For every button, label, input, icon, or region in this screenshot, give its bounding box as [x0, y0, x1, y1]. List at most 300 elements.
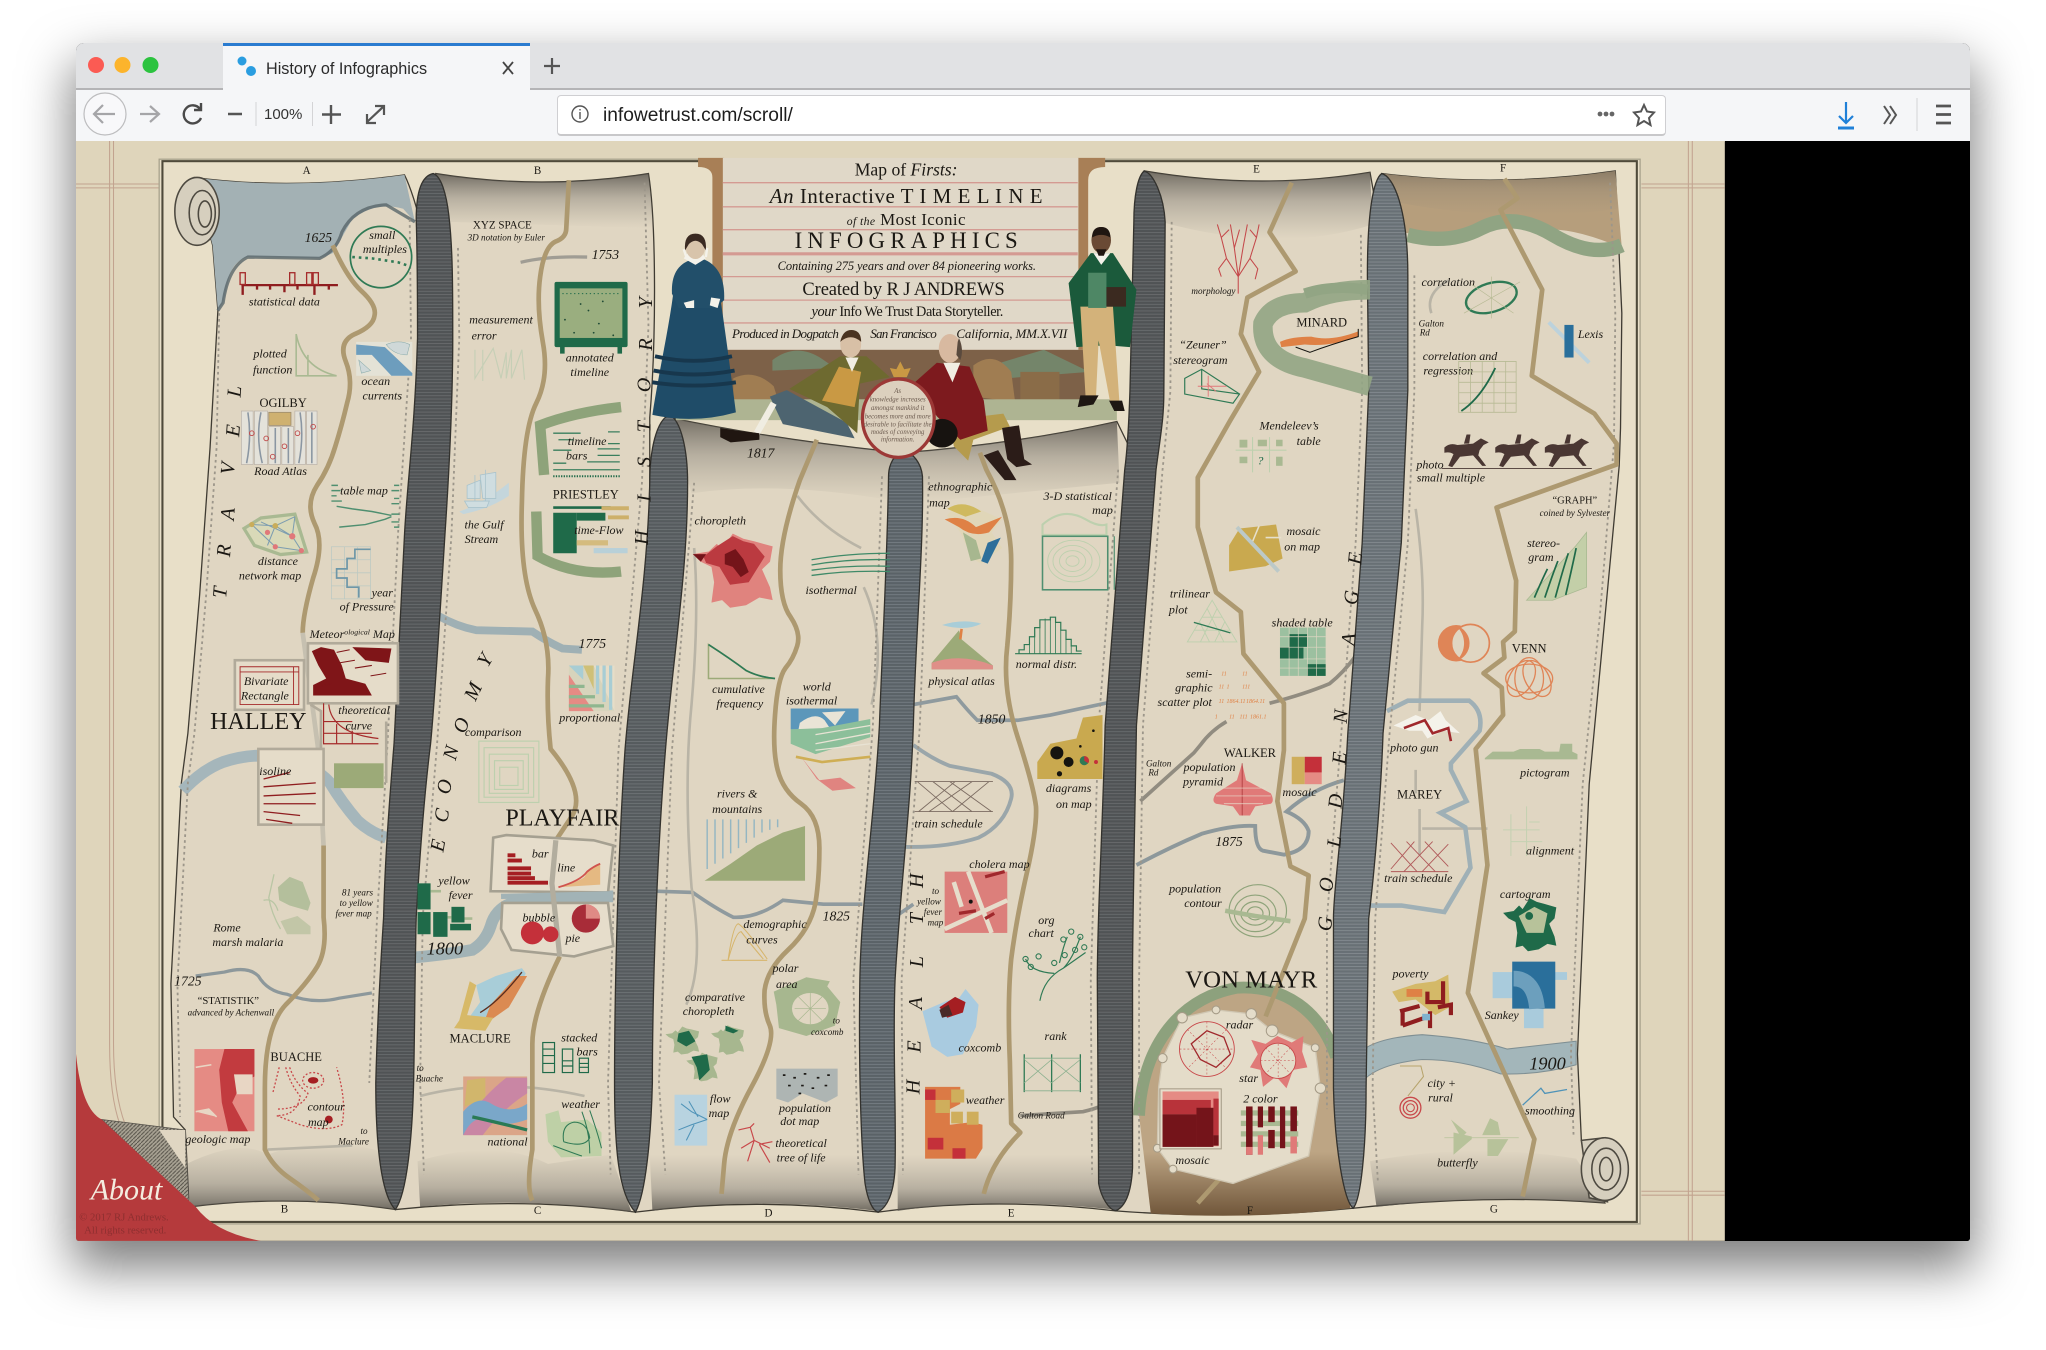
- Galton Road: [1020, 658, 1354, 1116]
- note: Galton Rd column G: Rd: [1419, 328, 1430, 338]
- note: to Maclure: Maclure: [337, 1137, 369, 1147]
- medallion: knowledge increases: [870, 397, 926, 404]
- river 1850: [913, 697, 1123, 720]
- panel: scroll column E: [877, 421, 1140, 1212]
- map: weather contour: weather: [561, 1097, 600, 1111]
- chart: 2 color: [1241, 1092, 1298, 1155]
- note: to coxcomb: [811, 1015, 844, 1037]
- chart: year of pressure: [331, 547, 394, 614]
- title line: storyteller: your Info We Trust Data Storyteller.: [810, 304, 1003, 320]
- vertical title: HEALTH: [902, 872, 928, 1095]
- chart: correlation: correlation: [1422, 275, 1475, 289]
- medallion: As: [893, 388, 901, 395]
- note: to Buache: to: [417, 1063, 424, 1073]
- map: Ogilby road atlas: [241, 396, 317, 478]
- note: 81 years to yellow fever map: to yellow: [340, 898, 374, 908]
- chart: butterfly: butterfly: [1437, 1156, 1478, 1170]
- note: Galton Rd column G: [1419, 319, 1444, 338]
- river 1700: [183, 756, 386, 838]
- chart: 3-D statistical map: 3-D statistical: [1043, 489, 1113, 503]
- panel: scroll column G: [1350, 171, 1622, 1208]
- chart: bubble: bubble: [523, 910, 556, 924]
- chart: smoothing: [1523, 1088, 1575, 1117]
- diagram: Zeuner stereogram: [1173, 337, 1240, 403]
- chart: stereogram: [1527, 532, 1587, 600]
- figure: seated man in red: [913, 334, 1032, 480]
- vertical title: HISTORY: Y: [635, 294, 657, 308]
- chart: pie: pie: [564, 931, 581, 945]
- column letters bottom: [281, 1204, 1498, 1219]
- map: Minard: [1263, 288, 1370, 386]
- chart: yellow fever: [418, 874, 473, 937]
- chart: radar: radar: [1226, 1017, 1254, 1031]
- map: geologic map: [185, 1049, 254, 1146]
- heading: VENN: VENN: [1512, 641, 1547, 655]
- chart: semi-graphic scatter plot: 11: [1219, 685, 1224, 691]
- map: ethnographic: [928, 480, 1002, 564]
- main road column A: [265, 245, 375, 1200]
- year labels: 1900: [1529, 1053, 1566, 1073]
- about link: About: [89, 1173, 163, 1206]
- chart: small multiples: small: [369, 228, 396, 242]
- heading: PLAYFAIR: PLAYFAIR: [505, 805, 620, 832]
- medallion: becomes more and more: [865, 413, 931, 420]
- diagram: theoretical tree of life: tree of life: [777, 1150, 826, 1164]
- map: ethnographic: ethnographic: [928, 480, 993, 494]
- vertical title: GOLDEN AGE: G: [1314, 915, 1337, 932]
- chart: cumulative frequency: [708, 645, 775, 710]
- chart: rivers and mountains: mountains: [712, 802, 763, 816]
- heading: PRIESTLEY: PRIESTLEY: [553, 488, 619, 502]
- chart: trilinear plot: [1168, 587, 1237, 642]
- map: distance network: network map: [239, 568, 301, 582]
- chart: polar area: polar: [771, 961, 799, 975]
- column letters top: B: [534, 165, 541, 177]
- vertical title: ECONOMY: E: [426, 837, 450, 854]
- chart: semi-graphic scatter plot: scatter plot: [1158, 695, 1213, 709]
- chart: normal distribution: normal distr.: [1016, 657, 1077, 671]
- note: 81 years to yellow fever map: 81 years: [342, 887, 374, 897]
- chart: semi-graphic scatter plot: 1: [1226, 685, 1229, 691]
- vertical title: HEALTH: H: [902, 1078, 924, 1095]
- tab title: History of Infographics: [266, 60, 427, 78]
- diagram: org chart: org: [1038, 913, 1055, 927]
- vertical title: HEALTH: L: [906, 956, 928, 968]
- note: to coxcomb: to: [833, 1015, 840, 1025]
- note: Galton Road: Galton Road: [1018, 1111, 1065, 1121]
- chart: polar area: area: [776, 977, 798, 991]
- chart: small multiples: multiples: [363, 242, 407, 256]
- note: STATISTIK: [188, 995, 275, 1018]
- river 1900: [1366, 1035, 1576, 1078]
- chart: yellow fever: fever: [449, 888, 473, 902]
- chart: weather grid: weather: [966, 1093, 1005, 1107]
- chart: polar area: [771, 961, 840, 1036]
- map: geologic map: geologic map: [185, 1132, 250, 1146]
- fold between B and D: [615, 415, 688, 1212]
- column letters bottom: B: [281, 1204, 288, 1216]
- scroll roll top left: [175, 177, 219, 245]
- map: flow map: flow: [710, 1092, 731, 1106]
- map: cartogram: cartogram: [1500, 887, 1551, 901]
- title line: Map of Firsts: Map of Firsts:: [855, 160, 958, 180]
- chart: semi-graphic scatter plot: 11: [1221, 672, 1227, 678]
- title line: produced in: California, MM.X.VII: [956, 326, 1068, 341]
- map: Maclure: [450, 968, 527, 1046]
- vertical title: ECONOMY: [426, 647, 499, 854]
- chart: stacked bars: [543, 1030, 598, 1073]
- vertical title: GOLDEN AGE: E: [1344, 551, 1367, 567]
- note: to Maclure: [337, 1126, 369, 1147]
- chart: plotted function: [252, 334, 337, 376]
- active tab: [223, 43, 530, 90]
- chart: time-flow: time-Flow: [574, 523, 624, 537]
- fold between D and E: [859, 450, 923, 1212]
- year labels: 1700: [272, 744, 312, 772]
- column letters bottom: D: [764, 1207, 773, 1219]
- lower left curl: [102, 1120, 196, 1208]
- river 1825: [655, 891, 913, 919]
- note: XYZ space: 3D notation by Euler: [467, 232, 545, 242]
- note: to coxcomb: coxcomb: [811, 1027, 844, 1037]
- title line: An Interactive Timeline: An Interactive T I M E L I N E: [768, 184, 1043, 208]
- chart: rank: [1024, 1029, 1080, 1092]
- column letters bottom: G: [1490, 1204, 1498, 1216]
- chart: stacked bars: bars: [576, 1045, 598, 1059]
- title line: containing: Containing 275 years and over 84 pioneering works.: [778, 259, 1036, 273]
- chart: Marey train schedule: train schedule: [1384, 871, 1453, 885]
- medallion: desirable to facilitate the: [864, 422, 932, 429]
- chart: demographic curves: demographic: [743, 917, 807, 931]
- chart: trilinear plot: plot: [1168, 602, 1188, 616]
- chart: semi-graphic scatter plot: [1158, 666, 1266, 721]
- map: flow map: [675, 1092, 731, 1146]
- title line: produced in: San Francisco: [870, 326, 937, 341]
- year labels: 1753: [592, 247, 619, 262]
- chart: semi-graphic scatter plot: 1864.11: [1246, 698, 1265, 705]
- chart: 3-D statistical map: map: [1092, 503, 1113, 517]
- vertical title: ECONOMY: N: [439, 742, 464, 763]
- page actions: [1598, 105, 1654, 125]
- map: flow map: map: [709, 1106, 729, 1120]
- map: Buache contour: map: [308, 1115, 329, 1129]
- reload: [184, 103, 201, 123]
- diagram: theoretical tree of life: theoretical: [775, 1136, 828, 1150]
- chart: comparison: comparison: [465, 725, 522, 739]
- diagram: org chart: chart: [1029, 926, 1055, 940]
- illustration: photo gun: [1389, 711, 1460, 755]
- map: national geologic: national: [488, 1135, 528, 1149]
- chart: Sankey: [1485, 962, 1567, 1028]
- map background paper: [76, 141, 1725, 1241]
- chart: population pyramid: pyramid: [1182, 775, 1224, 789]
- vertical title: HISTORY: R: [635, 338, 657, 352]
- chart: measurement error: measurement: [469, 313, 533, 327]
- chart: proportional: [558, 665, 621, 725]
- chart: cumulative frequency: cumulative: [712, 682, 765, 696]
- chart: stereogram: gram: [1528, 550, 1554, 564]
- title line: created by: Created by R J ANDREWS: [802, 279, 1005, 300]
- year labels: 1800: [427, 939, 463, 959]
- map: meteorological map: [308, 627, 398, 703]
- medallion: information.: [881, 437, 915, 444]
- panel: scroll column D: [633, 418, 906, 1212]
- brown top of column G: [1382, 171, 1622, 250]
- fold between E and F: [1097, 171, 1165, 1211]
- heading: HALLEY: HALLEY: [210, 708, 307, 735]
- map: poverty: [1391, 966, 1451, 1028]
- chart: semi-graphic scatter plot: semi-: [1186, 666, 1212, 680]
- map: Buache contour: contour: [308, 1099, 345, 1113]
- map: population dot map: dot map: [780, 1114, 819, 1128]
- chart: rivers and mountains: [705, 786, 805, 881]
- chart: yellow fever: yellow: [437, 874, 470, 888]
- chart: annotated timeline: annotated: [566, 351, 615, 365]
- chart: Lexis: Lexis: [1577, 327, 1603, 341]
- chart: comparison: [465, 725, 539, 802]
- side roads: [267, 281, 1487, 1150]
- copyright: © 2017 RJ Andrews.: [79, 1211, 169, 1223]
- map: cholera: cholera map: [969, 857, 1030, 871]
- map: ethnographic: map: [929, 495, 950, 509]
- vertical title: HEALTH: H: [906, 872, 928, 889]
- year labels: 1817: [747, 445, 776, 460]
- map: Ogilby road atlas: Road Atlas: [253, 464, 307, 478]
- note: Galton Rd: Galton: [1146, 758, 1172, 768]
- vertical title: HEALTH: A: [905, 997, 927, 1012]
- chart: year of pressure: of Pressure: [340, 600, 394, 614]
- chart: cumulative frequency: frequency: [716, 696, 764, 710]
- vertical title: HISTORY: S: [634, 457, 656, 467]
- chart: star: [1239, 1036, 1307, 1088]
- vertical title: HEALTH: E: [904, 1040, 926, 1054]
- vertical title: TRAVEL: L: [223, 385, 246, 399]
- title line: of the Most Iconic: of the Most Iconic: [847, 210, 966, 229]
- main road column F: [1198, 183, 1309, 1203]
- map: world isothermal: isothermal: [786, 694, 838, 708]
- vertical title: GOLDEN AGE: E: [1328, 750, 1352, 766]
- chart: walker mosaic: mosaic: [1283, 785, 1317, 799]
- chart: measurement error: [469, 313, 533, 381]
- back button: [84, 93, 126, 135]
- diagram: Venn knot: [1501, 656, 1557, 701]
- chart: Mendeleev's table: ?: [1257, 454, 1263, 468]
- chart: isoline: isoline: [259, 764, 292, 778]
- chart: walker mosaic: [1283, 757, 1322, 799]
- chart: semi-graphic scatter plot: 1861.1: [1250, 715, 1266, 721]
- chart: train schedule: train schedule: [914, 816, 983, 830]
- map: cholera: [945, 857, 1030, 933]
- vertical title: TRAVEL: R: [213, 543, 236, 559]
- illustration: photo gun: photo gun: [1389, 741, 1439, 755]
- column letters top: [303, 162, 1506, 177]
- copyright: [79, 1211, 169, 1236]
- year labels: 1850: [978, 711, 1005, 726]
- map: ocean currents: ocean: [361, 374, 390, 388]
- map: national geologic: [463, 1076, 528, 1149]
- map: ocean currents: currents: [363, 388, 402, 402]
- illustration: the Gulf Stream: Stream: [465, 532, 499, 546]
- note: GRAPH: [1540, 496, 1611, 518]
- figure: Nightingale: [652, 234, 736, 419]
- chart: population pyramid: [1182, 760, 1273, 816]
- chart: train schedule: [914, 782, 993, 830]
- chart: semi-graphic scatter plot: 111: [1242, 685, 1250, 691]
- vertical title: TRAVEL: V: [217, 459, 240, 475]
- heading: WALKER: WALKER: [1224, 746, 1277, 760]
- address bar: [557, 95, 1666, 136]
- medallion: amongst mankind it: [871, 405, 925, 412]
- note: to Buache: Buache: [416, 1073, 443, 1083]
- vertical title: ECONOMY: O: [433, 777, 457, 796]
- map: diagrams on map: diagrams: [1046, 781, 1092, 795]
- note: to yellow fever map: map: [928, 917, 944, 927]
- river 1753: [521, 257, 587, 262]
- year labels: 1725: [174, 974, 202, 989]
- note: to yellow fever map: yellow: [916, 897, 942, 907]
- vertical title: TRAVEL: E: [222, 423, 245, 439]
- title cartouche: [723, 158, 1078, 350]
- chart: physical atlas: [927, 621, 995, 688]
- chart: smoothing: smoothing: [1525, 1103, 1575, 1117]
- green arcs around Priestley: [536, 407, 621, 573]
- chart: semi-graphic scatter plot: 11: [1242, 672, 1248, 678]
- chart: butterfly: [1437, 1118, 1519, 1170]
- medallion: modes of conveying: [871, 429, 925, 436]
- fill panel green: [334, 763, 384, 788]
- diagram: org chart: [1023, 913, 1087, 1001]
- chart: city + rural: city +: [1428, 1076, 1456, 1090]
- map: comparative choropleth: comparative: [685, 990, 746, 1004]
- map: choropleth of France: [693, 514, 773, 608]
- zoom level: 100%: [264, 106, 302, 123]
- chart: plotted function: function: [253, 362, 292, 376]
- chart: city + rural: [1400, 1066, 1456, 1118]
- map: Minard: MINARD: [1296, 315, 1347, 329]
- hill behind Von Mayr fort: [1139, 988, 1350, 1216]
- diagram: Zeuner stereogram: stereogram: [1173, 353, 1228, 367]
- river 1725: [196, 970, 372, 1001]
- note: XYZ space: XYZ SPACE: [473, 220, 532, 232]
- map of firsts: [76, 141, 1970, 1241]
- map: mosaic on map: on map: [1284, 540, 1320, 554]
- chart: proportional: proportional: [558, 711, 621, 725]
- forward button: [140, 106, 159, 122]
- chart: isoline: [258, 749, 324, 825]
- map: Rome marsh malaria: marsh malaria: [212, 935, 283, 949]
- chart: Mendeleev's table: table: [1297, 434, 1321, 448]
- chart: coxcomb: [922, 989, 1001, 1057]
- title pillars: [698, 158, 1105, 350]
- new tab: [544, 58, 560, 74]
- vertical title: HISTORY: I: [634, 494, 656, 503]
- traffic lights: [88, 57, 158, 73]
- shading: bottom of columns: [187, 1144, 1605, 1212]
- river of column G: [1369, 701, 1480, 912]
- panel: scroll column B: [394, 174, 655, 1212]
- vertical title: HISTORY: H: [631, 529, 653, 546]
- chart: theoretical curve: theoretical: [338, 703, 390, 717]
- column letters bottom: E: [1008, 1207, 1015, 1219]
- main road column B: [522, 180, 576, 1200]
- vertical title: GOLDEN AGE: A: [1337, 632, 1361, 648]
- map: population dot map: [776, 1069, 838, 1128]
- chart: demographic curves: curves: [746, 932, 778, 946]
- map: meteorological map: ological: [344, 627, 370, 636]
- chart: plotted function: plotted: [253, 347, 287, 361]
- illustration: the Gulf Stream: [459, 470, 509, 546]
- black empty page area: [1725, 141, 1973, 1243]
- map: poverty: poverty: [1391, 966, 1429, 980]
- chart: timeline bars: timeline: [568, 434, 607, 448]
- vertical title: HISTORY: T: [634, 419, 656, 432]
- fold between F and G: [1333, 174, 1408, 1208]
- chart: theoretical curve: curve: [345, 718, 373, 732]
- map: Buache contour: [270, 1050, 345, 1129]
- diagram: bivariate rectangle: [235, 660, 304, 710]
- note: to Buache: [416, 1063, 443, 1083]
- chart: Sankey: Sankey: [1485, 1008, 1519, 1022]
- fort: Playfair charts: [491, 835, 613, 956]
- map: Ogilby road atlas: OGILBY: [259, 396, 307, 410]
- chart: trilinear plot: trilinear: [1170, 587, 1210, 601]
- title line: produced in: [731, 326, 1068, 341]
- chart: morphology: morphology: [1191, 286, 1236, 296]
- browser chrome icons: [83, 56, 1951, 136]
- chart: Marey train schedule: [1384, 842, 1453, 885]
- year labels: 1825: [823, 908, 850, 923]
- vertical title: HISTORY: O: [634, 377, 656, 392]
- vertical title: HISTORY: [631, 294, 657, 546]
- chart: population contour: [1168, 882, 1290, 937]
- chart: time-flow: [553, 506, 629, 553]
- vertical title: GOLDEN AGE: [1314, 551, 1367, 932]
- zoom controls: [228, 102, 341, 126]
- chart: radar: [1180, 1017, 1254, 1076]
- map frame: [159, 159, 1640, 1224]
- chart: statistical data: statistical data: [249, 294, 320, 308]
- chart: Lexis: [1549, 322, 1603, 363]
- chart: shaded table: shaded table: [1272, 615, 1333, 629]
- river 1800: [411, 896, 613, 958]
- map: mosaic on map: mosaic: [1286, 524, 1321, 538]
- chart: semi-graphic scatter plot: 11: [1219, 699, 1224, 705]
- vertical title: GOLDEN AGE: N: [1330, 707, 1353, 725]
- map: diagrams on map: [1037, 715, 1103, 811]
- chart: rivers and mountains: rivers &: [717, 786, 758, 800]
- map: Buache contour: BUACHE: [270, 1050, 322, 1064]
- chart: morphology: [1191, 224, 1259, 296]
- figure: reclining Playfair: [720, 330, 890, 442]
- about corner: [76, 1050, 261, 1241]
- chart: table map: [331, 484, 399, 527]
- chart: correlation: [1422, 275, 1520, 319]
- map: population dot map: population: [778, 1101, 831, 1115]
- diagram: theoretical tree of life: [738, 1123, 828, 1164]
- scroll roll bottom right: [1581, 1138, 1628, 1202]
- landscape behind title: [676, 350, 1117, 420]
- chart: shaded table: [1272, 615, 1333, 676]
- chart: measurement error: error: [472, 328, 497, 342]
- illustration: photo small multiple horses: [1415, 435, 1592, 485]
- toolbar: [76, 90, 1970, 142]
- chart: semi-graphic scatter plot: graphic: [1175, 681, 1213, 695]
- chart: bar: bar: [532, 846, 549, 860]
- title line: produced in: Produced in Dogpatch: [731, 326, 839, 341]
- chart: correlation and regression: correlation and: [1423, 349, 1498, 363]
- map: meteorological map: Meteor: [310, 627, 344, 641]
- copyright: All rights reserved.: [84, 1224, 166, 1236]
